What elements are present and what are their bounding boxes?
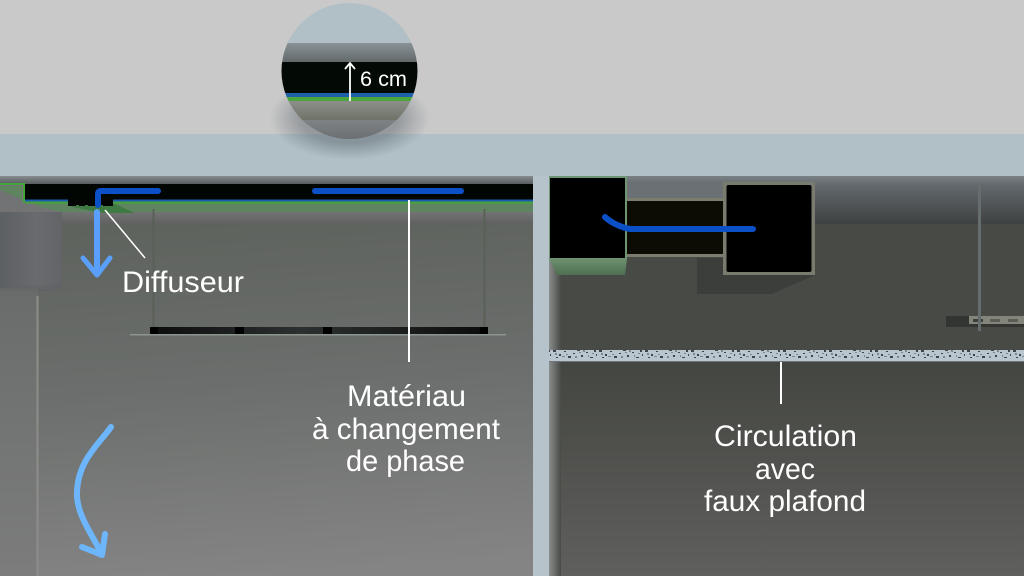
- black air gap: [25, 184, 533, 200]
- blue material bar left with bend: [98, 191, 158, 205]
- diffuser: [68, 199, 135, 213]
- below false ceiling: [549, 362, 1024, 576]
- arrow: air from diffuser: [83, 212, 110, 275]
- dimension arrow: [345, 63, 355, 101]
- leader: material: [408, 200, 410, 362]
- label: Matériau à changement de phase: à changement: [312, 413, 500, 446]
- magnifier: 6 cm detail: [280, 0, 420, 140]
- label: Diffuseur: Diffuseur: [122, 266, 244, 299]
- label: Circulation avec faux plafond: [704, 420, 866, 518]
- leader: diffuser: [105, 210, 145, 258]
- green panel: [0, 186, 533, 212]
- blue material bar centre: [315, 188, 461, 194]
- lens black gap: [280, 62, 420, 93]
- lens lower band: [302, 120, 396, 139]
- duct shadow: [697, 258, 815, 294]
- phase change ceiling layers: [0, 184, 533, 212]
- lens upper band: [280, 43, 420, 62]
- lens panel: [288, 101, 410, 120]
- concrete slab: [0, 134, 1024, 177]
- panel: left room with phase change ceiling: [0, 176, 533, 576]
- false ceiling: [549, 350, 1024, 362]
- magnifier shadow: [270, 76, 430, 160]
- main square duct: [723, 182, 815, 275]
- hanging bracket: [946, 183, 1024, 331]
- material blue line through ducts: [605, 217, 753, 229]
- label: Matériau à changement de phase: Matériau: [347, 380, 466, 413]
- right room wall: [549, 224, 1024, 350]
- wall shadow strip: [549, 224, 561, 576]
- label: Matériau à changement de phase: [312, 380, 500, 478]
- thin blue layer: [25, 200, 533, 202]
- thin green layer: [25, 202, 533, 204]
- label: Circulation avec faux plafond: Circulation: [714, 420, 857, 453]
- left top band: [0, 176, 533, 184]
- green edge line: [0, 184, 24, 202]
- left pillar: [0, 212, 62, 576]
- connecting duct: [627, 183, 724, 257]
- label: Circulation avec faux plafond: faux plafond: [704, 485, 866, 518]
- label: Circulation avec faux plafond: avec: [755, 453, 815, 486]
- right room ceiling: [549, 176, 1024, 224]
- arrow: air flowing in room: [77, 427, 111, 555]
- background: upper floor: [0, 0, 1024, 134]
- green duct: [549, 176, 627, 275]
- suspended light fixture: [130, 209, 506, 336]
- leader: corridor: [780, 362, 782, 404]
- left room back wall: [0, 224, 533, 576]
- panel: right room corridor: [549, 176, 1024, 576]
- label: Matériau à changement de phase: de phase: [346, 445, 465, 478]
- lens slab: [288, 3, 412, 43]
- dimension label: 6 cm: [360, 67, 407, 91]
- central wall: [533, 176, 549, 576]
- left room ceiling edge: [0, 176, 533, 224]
- lens green layer: [280, 97, 420, 101]
- lens blue layer: [280, 93, 420, 97]
